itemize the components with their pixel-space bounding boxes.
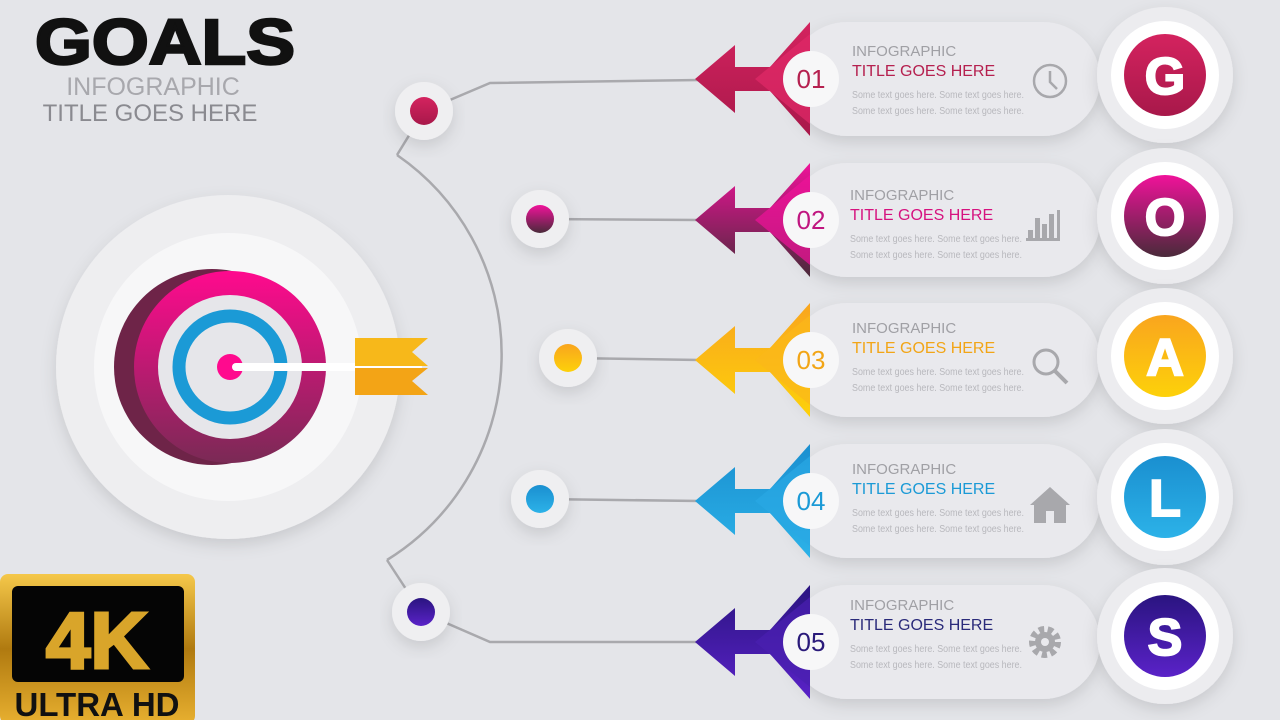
title: TITLE GOES HERE [43, 100, 257, 127]
row 5 [695, 568, 1233, 704]
row 1: 01 [797, 64, 825, 94]
row 4: 04 [797, 486, 825, 516]
row 2: INFOGRAPHIC [850, 187, 954, 204]
row 1 [695, 7, 1233, 143]
row 2: 02 [797, 205, 825, 235]
row 1: Some text goes here. Some text goes here. [852, 90, 1024, 101]
row 4: Some text goes here. Some text goes here. [852, 524, 1024, 535]
row 3: Some text goes here. Some text goes here. [852, 367, 1024, 378]
row 1: Some text goes here. Some text goes here. [852, 106, 1024, 117]
row 5: S [1148, 609, 1182, 667]
row 2: Some text goes here. Some text goes here. [850, 250, 1022, 261]
row 2 [695, 148, 1233, 284]
title: INFOGRAPHIC [66, 73, 240, 101]
row 4: INFOGRAPHIC [852, 461, 956, 478]
row 3: A [1146, 329, 1184, 387]
row 4: TITLE GOES HERE [852, 481, 995, 498]
row 3: TITLE GOES HERE [852, 340, 995, 357]
row 5: Some text goes here. Some text goes here. [850, 644, 1022, 655]
target panel [56, 195, 428, 539]
row 1: TITLE GOES HERE [852, 63, 995, 80]
dots [392, 82, 597, 641]
row 4: L [1149, 470, 1181, 528]
4K badge [0, 574, 195, 720]
row 3: 03 [797, 345, 825, 375]
row 3: INFOGRAPHIC [852, 320, 956, 337]
title: GOALS [35, 6, 295, 78]
row 2: Some text goes here. Some text goes here. [850, 234, 1022, 245]
row 3 [695, 288, 1233, 424]
row 2: O [1145, 189, 1185, 247]
target rings [114, 269, 310, 465]
arrow in target [232, 363, 422, 371]
row 5: TITLE GOES HERE [850, 617, 993, 634]
row 5: 05 [797, 627, 825, 657]
row 2: TITLE GOES HERE [850, 207, 993, 224]
row 5: Some text goes here. Some text goes here. [850, 660, 1022, 671]
row 4 [695, 429, 1233, 565]
row 4: Some text goes here. Some text goes here. [852, 508, 1024, 519]
row 5: INFOGRAPHIC [850, 597, 954, 614]
connector arc and lines [387, 80, 700, 642]
row 3: Some text goes here. Some text goes here. [852, 383, 1024, 394]
row 1: G [1145, 48, 1185, 106]
title [35, 6, 295, 127]
4K badge: 4K [46, 596, 148, 685]
row 1: INFOGRAPHIC [852, 43, 956, 60]
